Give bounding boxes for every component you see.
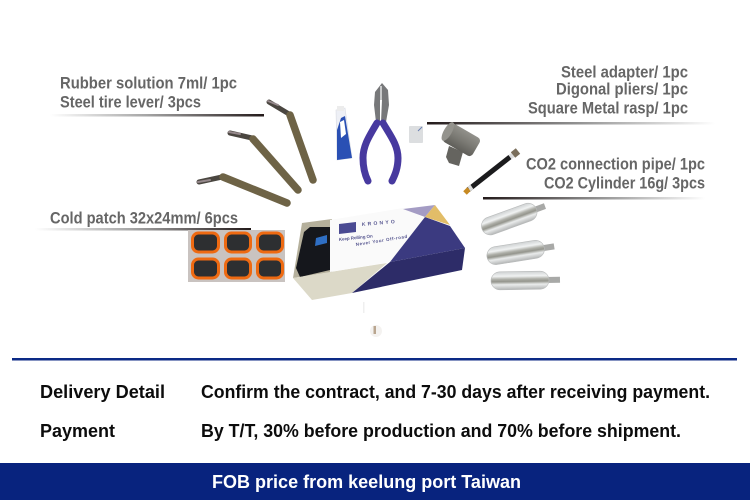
delivery detail row: Confirm the contract, and 7-30 days after receiving payment. <box>201 381 710 402</box>
box text <box>339 219 408 247</box>
delivery detail row: Delivery Detail <box>40 381 165 402</box>
icon: steel adapter <box>439 120 482 166</box>
sleeve dark side <box>352 248 465 293</box>
box text: KRONYO <box>362 219 395 228</box>
icon: cold patch sheet <box>188 230 285 282</box>
label: CO2 pipe and cylinder: CO2 connection pipe/ 1pc <box>526 156 705 174</box>
sleeve purple top <box>390 217 465 262</box>
icon: rubber solution tube <box>336 106 352 160</box>
label: CO2 pipe and cylinder: CO2 Cylinder 16g/ 3pcs <box>544 174 705 192</box>
box text: Keep Rolling On <box>339 233 373 242</box>
label: adapter, pliers and rasp: Digonal pliers/ 1pc <box>556 80 688 98</box>
label: rubber solution and tire lever: Rubber solution 7ml/ 1pc <box>60 74 237 92</box>
payment row: Payment <box>40 420 115 441</box>
payment row: By T/T, 30% before production and 70% before shipment. <box>201 420 681 441</box>
icon: steel tire levers <box>198 101 313 203</box>
label: adapter, pliers and rasp: Square Metal rasp/ 1pc <box>528 100 688 118</box>
gold triangle <box>425 205 450 225</box>
tray front <box>293 263 387 300</box>
tray interior <box>293 219 332 278</box>
label: rubber solution and tire lever <box>50 74 264 116</box>
icon: square metal rasp <box>409 126 423 143</box>
label: adapter, pliers and rasp: Steel adapter/ 1pc <box>561 64 688 82</box>
icon: CO2 connection pipe <box>465 151 518 193</box>
repair pouch <box>296 227 330 277</box>
box text: Never Your Off-road <box>355 234 408 247</box>
label: adapter, pliers and rasp <box>427 64 715 124</box>
divider line <box>12 358 737 360</box>
lilac triangle <box>403 205 435 217</box>
icon: diagonal pliers <box>363 83 398 181</box>
footer banner: FOB price from keelung port Taiwan <box>212 471 521 492</box>
label: cold patch: Cold patch 32x24mm/ 6pcs <box>50 210 238 228</box>
sleeve white face <box>330 208 425 272</box>
footer banner <box>0 463 750 500</box>
brand logo <box>339 222 356 234</box>
icon: product box <box>293 205 465 300</box>
label: CO2 pipe and cylinder <box>483 156 705 200</box>
icon: CO2 cylinders <box>479 198 560 290</box>
label: rubber solution and tire lever: Steel tire lever/ 3pcs <box>60 94 201 112</box>
icon: small stray marks below box <box>363 302 382 337</box>
